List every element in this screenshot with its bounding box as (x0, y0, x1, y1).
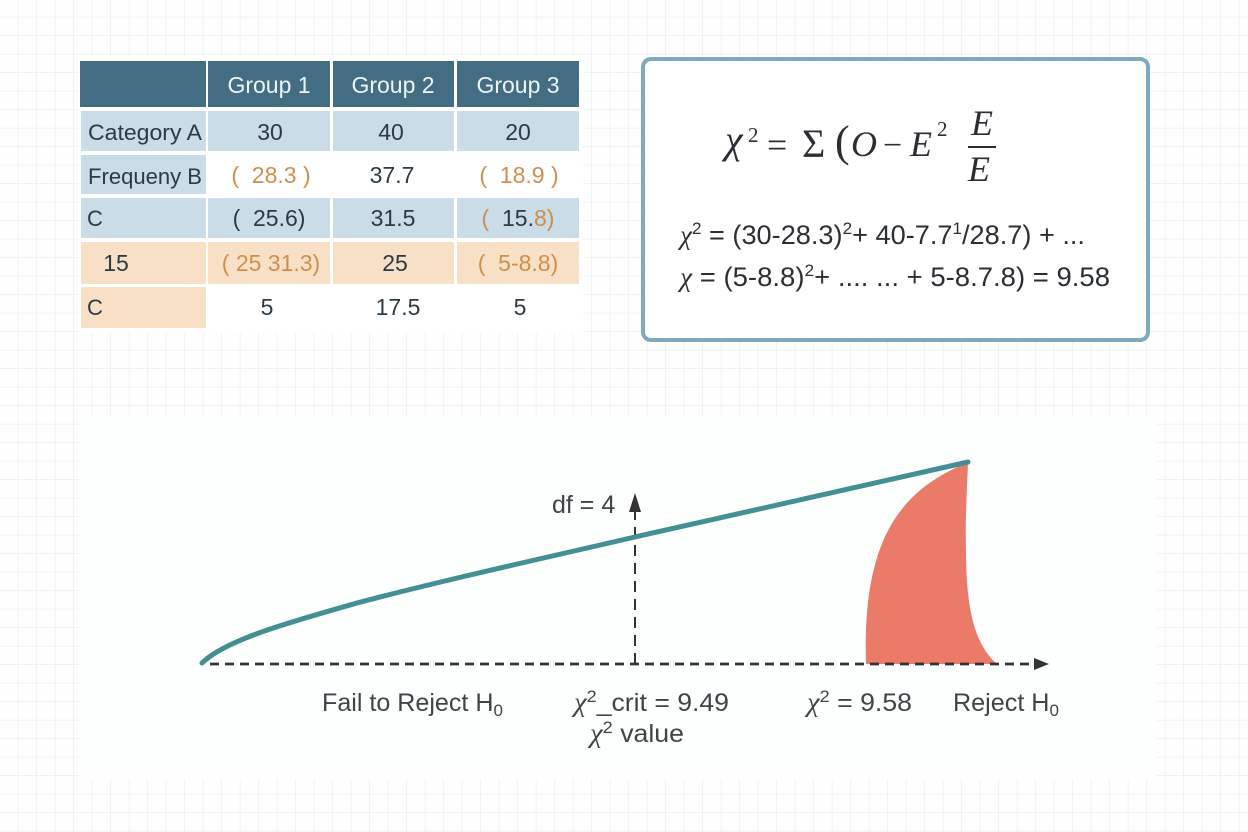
main chi-square formula: E (909, 124, 932, 164)
main chi-square formula (721, 103, 996, 189)
table row: Frequeny B: ( 18.9 ) (479, 162, 559, 188)
main chi-square formula: Σ (802, 121, 825, 166)
worked calculation line 2: 2 (804, 261, 814, 280)
label: axis title: value (613, 720, 684, 748)
table row: C totals (81, 287, 526, 328)
table row: Category A: 20 (505, 119, 531, 145)
table row: C: ( 15.8) (482, 205, 554, 231)
panel: chi-square distribution chart (80, 417, 1156, 779)
horizontal axis (210, 658, 1049, 670)
table row: Frequeny B: Frequeny B (88, 164, 202, 189)
main chi-square formula: 2 (937, 117, 948, 141)
label: test statistic: 2 (820, 687, 830, 706)
main chi-square formula: − (883, 127, 902, 164)
worked calculation line 1: + 40-7.7 (852, 220, 952, 250)
vertical critical value axis (629, 493, 641, 664)
worked calculation line 1: 2 (692, 219, 701, 238)
worked calculation line 2: + .... ... + 5-8.7.8) = 9.58 (814, 262, 1110, 292)
panel: formula box (643, 59, 1148, 340)
table row: C totals: 5 (261, 294, 273, 320)
main chi-square formula: ( (835, 117, 850, 166)
rejection region (866, 463, 997, 664)
label: critical value: _crit = 9.49 (596, 689, 729, 717)
worked calculation line 1: 1 (952, 219, 962, 238)
label: test statistic: = 9.58 (830, 689, 912, 717)
table row: C: C (87, 206, 103, 231)
table row: C: 31.5 (371, 205, 415, 231)
main chi-square formula: O (851, 124, 877, 164)
table row: C totals: 17.5 (376, 294, 420, 320)
table row: Frequeny B: ( 28.3 ) (231, 162, 311, 188)
main chi-square formula: 2 (748, 123, 758, 147)
table row: 15: 15 (103, 250, 129, 276)
table row: Category A (81, 111, 579, 151)
table header row: Group 2 (351, 72, 435, 98)
label: axis title: χ (587, 718, 604, 748)
table row: 15: ( 5-8.8) (478, 250, 558, 276)
label: critical value: 2 (587, 687, 597, 706)
table header row: Group 3 (476, 72, 560, 98)
table row: 15 (81, 242, 579, 284)
main chi-square formula: χ (721, 117, 744, 162)
table row: C totals: C (87, 295, 103, 320)
label: fail to reject: 0 (493, 701, 503, 720)
worked calculation line 1: 2 (843, 219, 852, 238)
panel: contingency table (78, 56, 583, 333)
table row: Category A: 40 (378, 119, 404, 145)
main chi-square formula: E (967, 149, 990, 189)
label: critical value: χ (571, 687, 588, 717)
main chi-square formula: E (970, 103, 993, 143)
worked calculation line 1: χ (677, 220, 693, 250)
table row: Category A: 30 (257, 119, 283, 145)
table row: C totals: 5 (514, 294, 526, 320)
worked calculation line 1: = (30-28.3) (701, 220, 843, 250)
label: reject: Reject H (953, 689, 1049, 717)
label: df: df = 4 (552, 491, 615, 519)
distribution curve (202, 462, 968, 663)
table row: C: ( 25.6) (233, 205, 305, 231)
table row: 15: 25 (382, 250, 408, 276)
table header row: Group 1 (227, 72, 311, 98)
worked calculation line 2: χ = (5-8.8) (680, 262, 802, 292)
table row: Frequeny B (81, 155, 559, 194)
label: reject: 0 (1049, 701, 1059, 720)
main chi-square formula: = (767, 125, 787, 165)
table row: C (81, 198, 579, 238)
label: axis title: 2 (603, 718, 613, 737)
table header row (80, 61, 579, 107)
label: fail to reject: Fail to Reject H (322, 689, 493, 717)
label: test statistic: χ (804, 687, 821, 717)
table row: 15: ( 25 31.3) (222, 250, 320, 276)
table row: Category A: Category A (88, 120, 202, 145)
worked calculation line 1: /28.7) + ... (962, 220, 1085, 250)
table row: Frequeny B: 37.7 (370, 162, 414, 188)
